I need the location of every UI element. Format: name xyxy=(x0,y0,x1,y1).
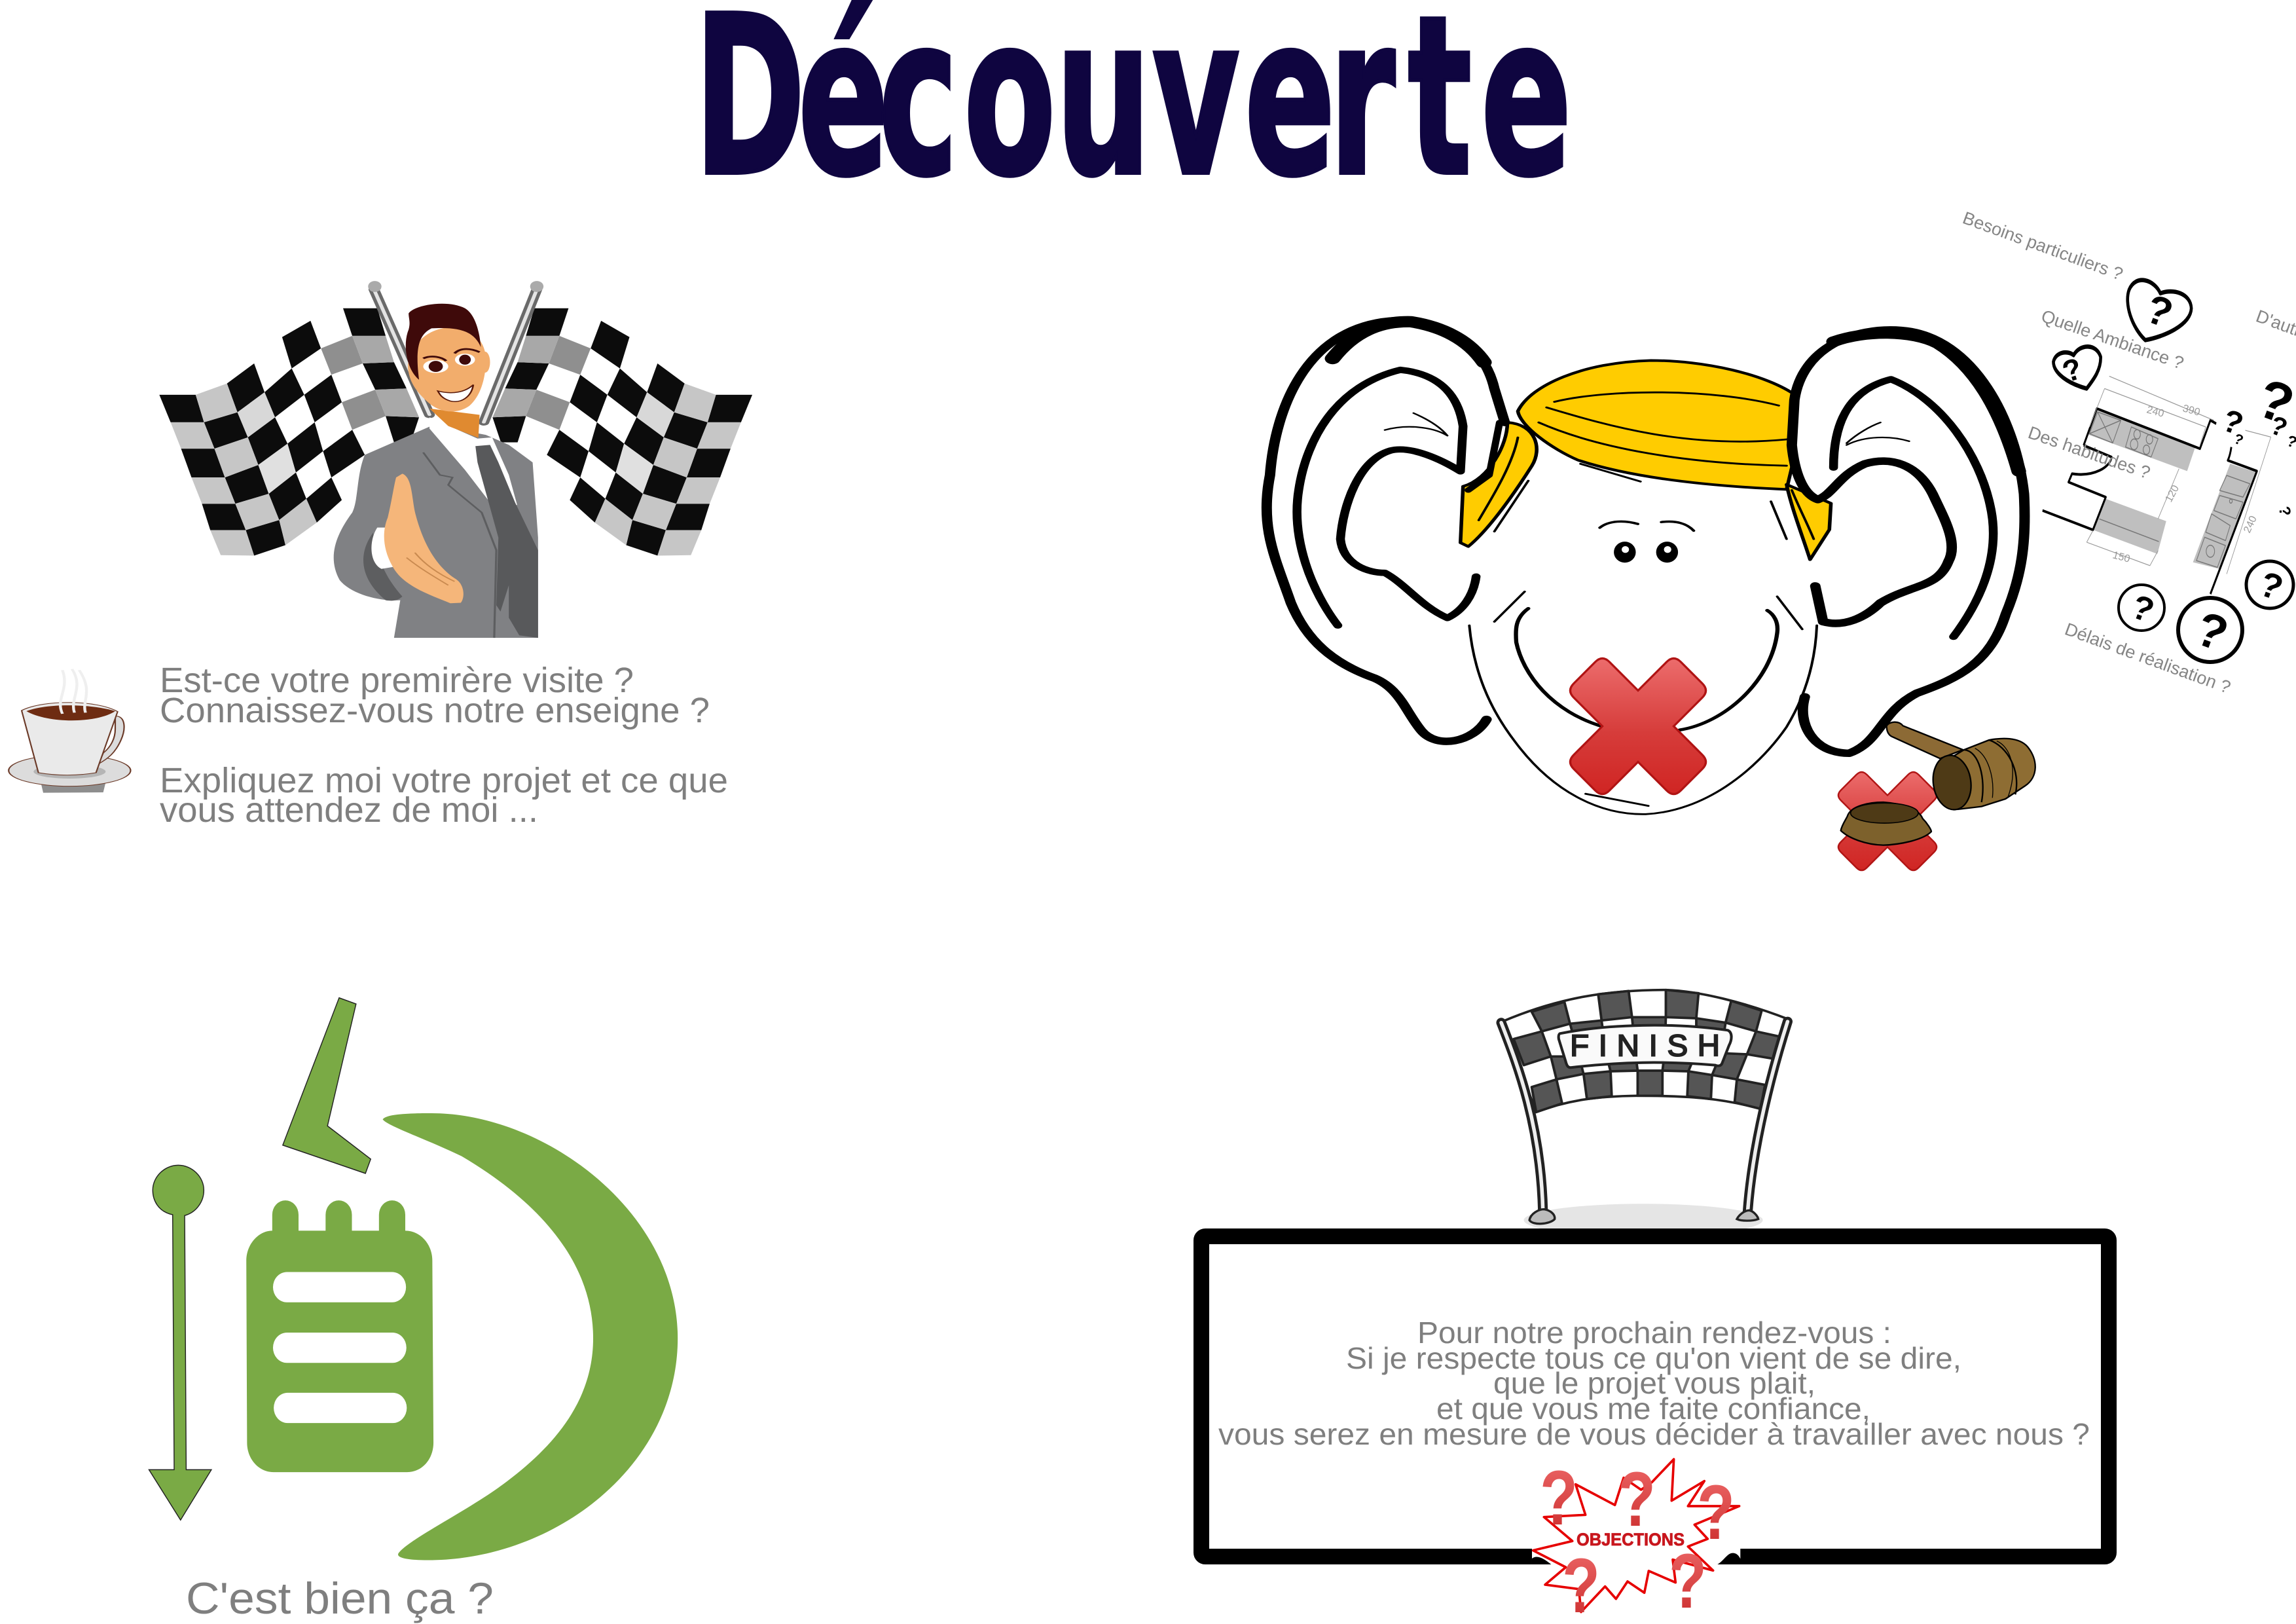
panel: listening xyxy=(1267,208,2296,870)
question marks: ? xyxy=(2058,351,2086,389)
panel: reformulation xyxy=(149,998,678,1623)
illustration: man with checkered flags xyxy=(159,281,752,638)
icon: red cross over mouth xyxy=(1570,658,1706,794)
text: closing question: vous serez en mesure de vous décider à travailler avec nous ? xyxy=(1218,1417,2090,1451)
man in grey suit xyxy=(334,304,538,638)
text: welcome questions: Expliquez moi votre projet et ce que xyxy=(160,761,728,800)
panel: next meeting xyxy=(1201,990,2109,1624)
illustration: finish banner xyxy=(1501,990,1789,1236)
questions text xyxy=(1960,208,2296,697)
question marks: ? xyxy=(2189,600,2235,662)
plan dimensions: 240 xyxy=(2145,404,2165,420)
text: confirmation question: C'est bien ça ? xyxy=(186,1574,494,1623)
right ear xyxy=(1792,330,2024,753)
finish sign: FINISH xyxy=(1570,1029,1720,1062)
hearts xyxy=(2053,280,2191,388)
question marks: ? xyxy=(2217,403,2248,442)
text: closing question: Pour notre prochain rendez-vous : xyxy=(1417,1316,1891,1350)
text: welcome questions xyxy=(160,661,728,830)
text: welcome questions: vous attendez de moi ... xyxy=(160,790,538,830)
crescent bracket xyxy=(149,998,678,1560)
panel: welcome xyxy=(9,281,752,830)
icon: gavel xyxy=(1841,722,2035,845)
plan dimensions xyxy=(2111,403,2259,565)
questions text: Des habitudes ? xyxy=(2026,422,2153,483)
hair xyxy=(1461,360,1831,560)
icon: notepad xyxy=(246,1200,433,1472)
face xyxy=(1469,464,1817,814)
red question marks: ? xyxy=(1618,1456,1656,1542)
finish sign xyxy=(1559,1025,1732,1067)
text: closing question xyxy=(1218,1316,2090,1451)
left ear xyxy=(1267,321,1504,741)
objections starburst xyxy=(1532,1454,1741,1624)
questions text: Délais de réalisation ? xyxy=(2062,619,2233,697)
kitchen plan drawing xyxy=(2043,376,2271,594)
flag poles xyxy=(368,281,543,422)
plan dimensions: 240 xyxy=(2242,514,2259,535)
text: welcome questions: Connaissez-vous notre enseigne ? xyxy=(160,691,710,730)
questions text: Besoins particuliers ? xyxy=(1960,208,2126,284)
right checkered flag xyxy=(492,308,752,556)
text: closing question: Si je respecte tous ce qu'on vient de se dire, xyxy=(1346,1341,1961,1375)
question marks: ? xyxy=(2275,505,2294,517)
question marks: ? xyxy=(2126,587,2159,631)
kitchen plan with questions xyxy=(1960,208,2296,697)
circles xyxy=(2119,561,2293,662)
objections label: OBJECTIONS xyxy=(1576,1530,1685,1549)
red question marks xyxy=(1540,1454,1735,1624)
question marks: ? xyxy=(2254,564,2288,608)
question marks: ? xyxy=(2140,286,2179,337)
question marks: ? xyxy=(2232,430,2246,449)
illustration: face with big ears xyxy=(1267,321,2024,814)
text: welcome questions: Est-ce votre premirère visite ? xyxy=(160,661,634,700)
red question marks: ? xyxy=(1669,1538,1707,1624)
left checkered flag xyxy=(159,308,419,556)
frame gap xyxy=(1532,1459,1741,1612)
red question marks: ? xyxy=(1697,1469,1735,1555)
black framed box xyxy=(1201,1236,2109,1557)
questions text: Quelle Ambiance ? xyxy=(2039,306,2186,373)
text: closing question: que le projet vous plait, xyxy=(1493,1366,1815,1400)
question marks xyxy=(2058,286,2296,662)
question marks: ? xyxy=(2266,411,2291,443)
pole feet xyxy=(1529,1209,1758,1224)
hook arrow xyxy=(283,998,371,1173)
pin arrow xyxy=(149,1165,211,1520)
red question marks: ? xyxy=(1540,1454,1578,1541)
banner poles xyxy=(1501,1022,1787,1211)
icon: small red cross xyxy=(1838,772,1937,870)
plan dimensions: 390 xyxy=(2181,403,2201,418)
icon: coffee cup xyxy=(9,669,130,793)
plan dimensions: 120 xyxy=(2164,483,2181,504)
plan dimensions: 150 xyxy=(2111,549,2131,565)
text: closing question: et que vous me faite confiance, xyxy=(1436,1392,1870,1426)
